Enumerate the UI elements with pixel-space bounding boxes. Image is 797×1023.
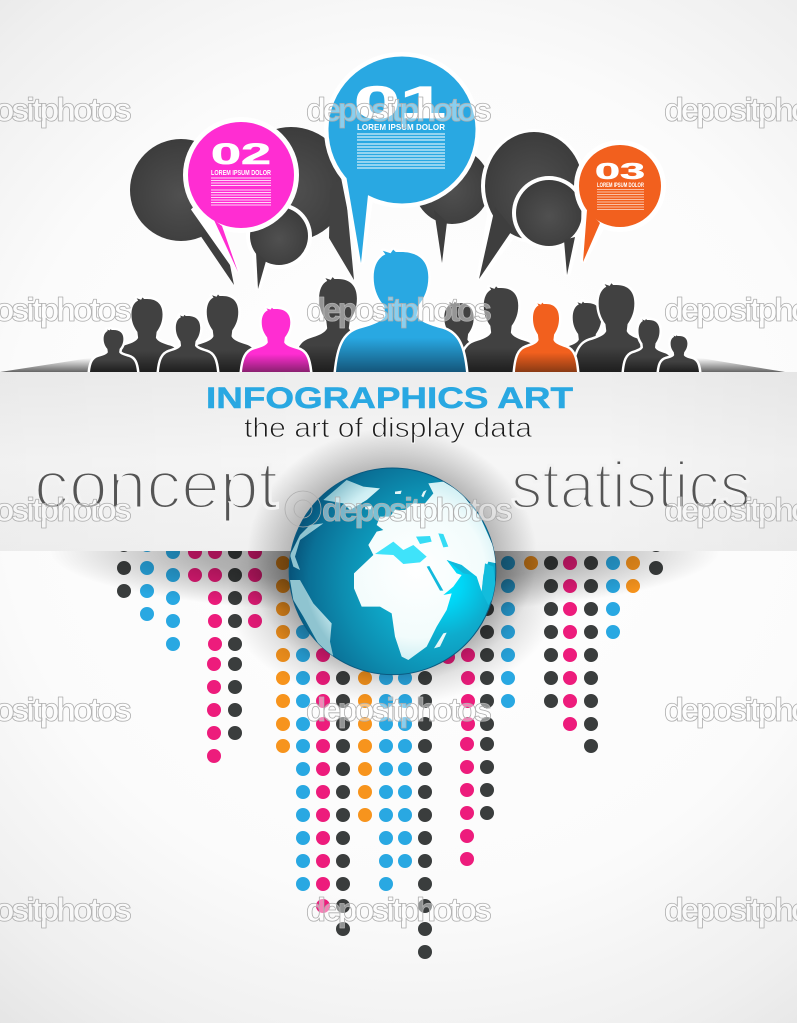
person: far left	[90, 329, 137, 372]
person: left third	[159, 315, 217, 372]
person: tall right	[574, 283, 659, 372]
caption 02: LOREM IPSUM DOLOR	[211, 168, 271, 177]
watermark row 3	[0, 491, 797, 528]
shadow beneath panel	[67, 551, 703, 698]
bubble: 01 blue	[324, 52, 480, 263]
number 03: 03	[595, 158, 645, 184]
text lines 02	[211, 178, 271, 205]
heading: statistics: statistics	[511, 448, 751, 522]
watermark row 5: depositphotos	[306, 891, 492, 928]
watermark row 5	[0, 891, 797, 928]
person: far right	[659, 335, 699, 372]
person: behind blue left	[293, 277, 383, 372]
person: left fourth	[185, 294, 260, 372]
panel: central band	[0, 372, 797, 551]
globe	[289, 468, 497, 675]
bubble: dark small centre-left	[246, 203, 312, 289]
bubble: dark behind centre	[234, 127, 354, 280]
dots: blue	[147, 545, 613, 884]
indian ocean	[482, 563, 497, 605]
bubble: dark beside blue	[414, 148, 490, 263]
caption 01: LOREM IPSUM DOLOR	[357, 122, 445, 132]
number 02: 02	[211, 138, 271, 171]
bubble: dark left large	[130, 139, 234, 285]
title: INFOGRAPHICS ART	[206, 382, 573, 415]
person: magenta	[242, 308, 310, 372]
crowd of silhouettes	[90, 250, 699, 372]
caption 03: LOREM IPSUM DOLOR	[597, 183, 644, 189]
person: far left second	[110, 298, 184, 372]
floor shadow behind the crowd	[0, 358, 785, 372]
watermark row 1	[0, 91, 797, 128]
globe halo shadow	[247, 428, 537, 684]
bubble: 03 orange	[574, 140, 666, 262]
dots: magenta	[195, 552, 570, 906]
watermark row 4	[0, 691, 797, 728]
watermark row 3: depositphotos	[322, 491, 513, 528]
continents	[354, 482, 497, 660]
text lines 03	[597, 190, 644, 210]
bubble: 02 magenta	[183, 117, 299, 272]
person: behind right	[553, 302, 621, 372]
bubble: dark right large	[479, 129, 587, 279]
dark speech bubbles	[130, 127, 587, 289]
watermark row 2	[0, 291, 797, 328]
subtitle: the art of display data	[244, 412, 532, 443]
person: blue centre	[336, 250, 466, 372]
person: orange	[515, 303, 577, 372]
dots: dark	[124, 545, 656, 952]
watermark row 4: depositphotos	[306, 691, 492, 728]
person: behind blue right	[424, 302, 494, 372]
dots: orange	[283, 563, 633, 815]
watermark row 2: depositphotos	[306, 291, 492, 328]
person: right second	[624, 319, 674, 372]
bubble: dark right small	[512, 176, 586, 275]
number 01: 01	[354, 77, 446, 128]
watermark row 1: depositphotos	[306, 91, 492, 128]
person: right of blue	[460, 286, 542, 372]
dot matrix chart	[124, 545, 656, 952]
inland seas	[375, 542, 427, 564]
text lines 01	[357, 134, 445, 168]
heading: concept: concept	[34, 448, 278, 523]
